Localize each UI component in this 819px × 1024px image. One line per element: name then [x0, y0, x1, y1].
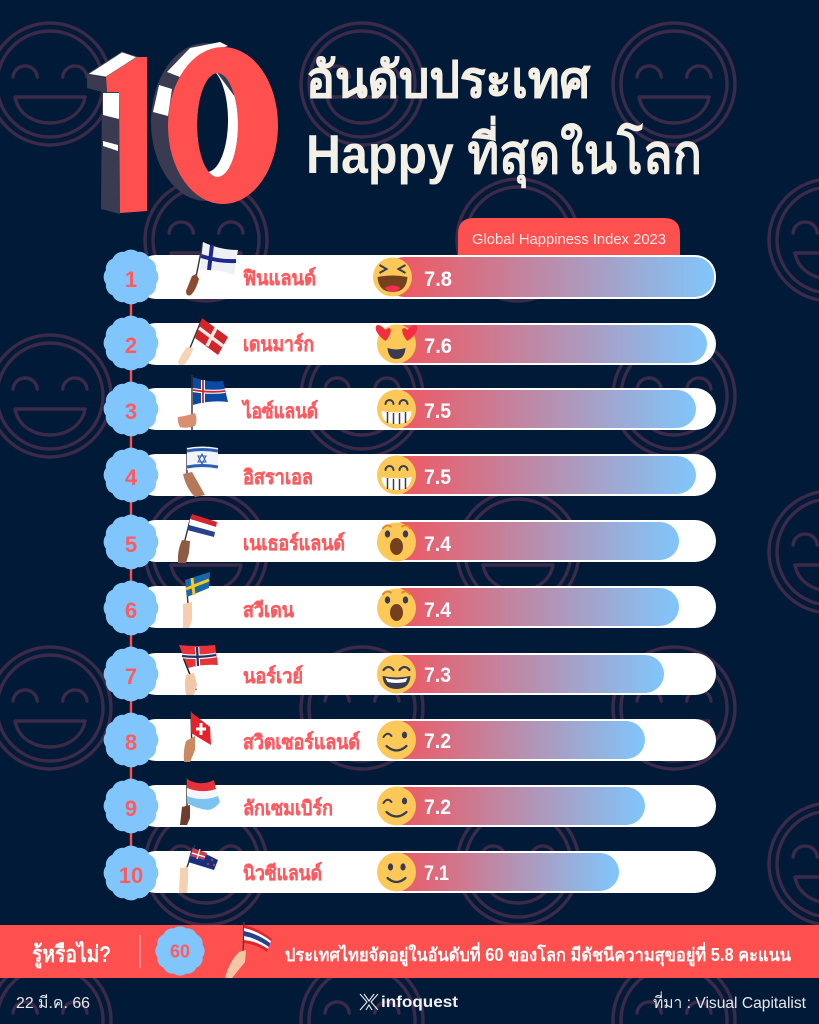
date: 22 มี.ค. 66 [16, 994, 90, 1012]
big 3D number 10: 0 [160, 6, 286, 249]
rank badge [104, 846, 158, 900]
country name: สวิตเซอร์แลนด์ [243, 731, 360, 754]
country name: เนเธอร์แลนด์ [243, 532, 345, 555]
emoji [373, 258, 412, 296]
score bar [385, 522, 679, 560]
score bar [385, 655, 664, 693]
score bar [385, 588, 679, 626]
emoji [377, 522, 416, 562]
emoji [377, 390, 416, 428]
row 4 Israel [104, 446, 716, 502]
score: 7.2 [424, 796, 451, 819]
row 1 Finland [104, 242, 716, 304]
score bar [385, 853, 619, 891]
rank badge [104, 448, 158, 502]
flag New Zealand [179, 845, 218, 893]
rank badge: 10 [119, 863, 143, 888]
country name: ไอซ์แลนด์ [241, 399, 318, 423]
infoquest logo: infoquest [381, 994, 458, 1011]
flag Luxembourg [180, 778, 220, 825]
country name: อิสราเอล [243, 467, 313, 489]
flag Switzerland [184, 711, 211, 762]
row 8 Switzerland [104, 711, 716, 767]
emoji [377, 456, 416, 494]
rank badge: 7 [125, 664, 137, 689]
country name: ฟินแลนด์ [243, 267, 316, 290]
rank 60 badge: 60 [170, 941, 190, 961]
rank badge: 8 [125, 730, 137, 755]
title [306, 52, 702, 189]
rank badge [104, 250, 158, 304]
score: 7.6 [424, 335, 452, 358]
score: 7.4 [424, 533, 451, 556]
connector line [130, 277, 132, 872]
score: 7.3 [424, 664, 451, 687]
title: Happy ที่สุดในโลก [306, 115, 702, 189]
country name: นอร์เวย์ [243, 665, 303, 688]
rank badge: 4 [125, 465, 138, 490]
title: อันดับประเทศ [306, 52, 591, 108]
rank badge: 3 [125, 399, 137, 424]
big 3D number 10: 1 [92, 10, 215, 260]
country name: ลักเซมเบิร์ก [243, 797, 333, 820]
score bar [385, 257, 714, 297]
rank badge [104, 713, 158, 767]
score: 7.4 [424, 599, 451, 622]
row 2 Denmark [104, 316, 716, 370]
big 3D number 10 [87, 42, 278, 214]
emoji [376, 324, 417, 364]
source: ที่มา : Visual Capitalist [653, 991, 807, 1012]
flag Finland [186, 242, 238, 296]
rank badge: 1 [125, 267, 137, 292]
rank badge [104, 647, 158, 701]
row 9 Luxembourg [104, 778, 716, 833]
flag Denmark [178, 318, 228, 365]
flag Norway [179, 645, 218, 695]
row 5 Netherlands [104, 514, 716, 569]
score bar [385, 325, 707, 363]
rank badge: 6 [125, 598, 137, 623]
score: 7.2 [424, 730, 451, 753]
score bar [385, 721, 645, 759]
rank badge [104, 316, 158, 370]
rank 60 badge [155, 926, 205, 976]
rank badge [104, 515, 158, 569]
score bar [385, 787, 645, 825]
row 3 Iceland [104, 375, 716, 436]
emoji [377, 588, 416, 628]
score bar [385, 390, 696, 428]
score: 7.5 [424, 466, 451, 489]
rank badge [104, 779, 158, 833]
emoji [377, 786, 416, 826]
flag Thailand [225, 922, 272, 978]
score: 7.8 [424, 268, 452, 291]
flag Netherlands [178, 514, 217, 563]
row 7 Norway [104, 645, 716, 701]
country name: เดนมาร์ก [243, 333, 314, 356]
rank badge: 5 [125, 532, 137, 557]
index tab: Global Happiness Index 2023 [472, 231, 666, 248]
score bar [385, 456, 696, 494]
rank badge: 9 [125, 796, 137, 821]
did you know banner [0, 922, 819, 978]
flag Israel [183, 446, 218, 497]
rank badge: 2 [125, 333, 137, 358]
rank badge [104, 382, 158, 436]
score: 7.5 [424, 400, 451, 423]
flag Sweden [183, 572, 210, 628]
emoji [377, 654, 416, 694]
rank badge [104, 581, 158, 635]
did you know heading: รู้หรือไม่? [32, 940, 111, 969]
emoji [377, 720, 416, 760]
index tab [458, 218, 680, 258]
country name: สวีเดน [243, 599, 294, 622]
flag Iceland [178, 375, 228, 430]
emoji [377, 852, 416, 892]
country name: นิวซีแลนด์ [243, 862, 322, 885]
score: 7.1 [424, 862, 449, 885]
row 6 Sweden [104, 572, 716, 635]
row 10 New Zealand [104, 845, 716, 900]
